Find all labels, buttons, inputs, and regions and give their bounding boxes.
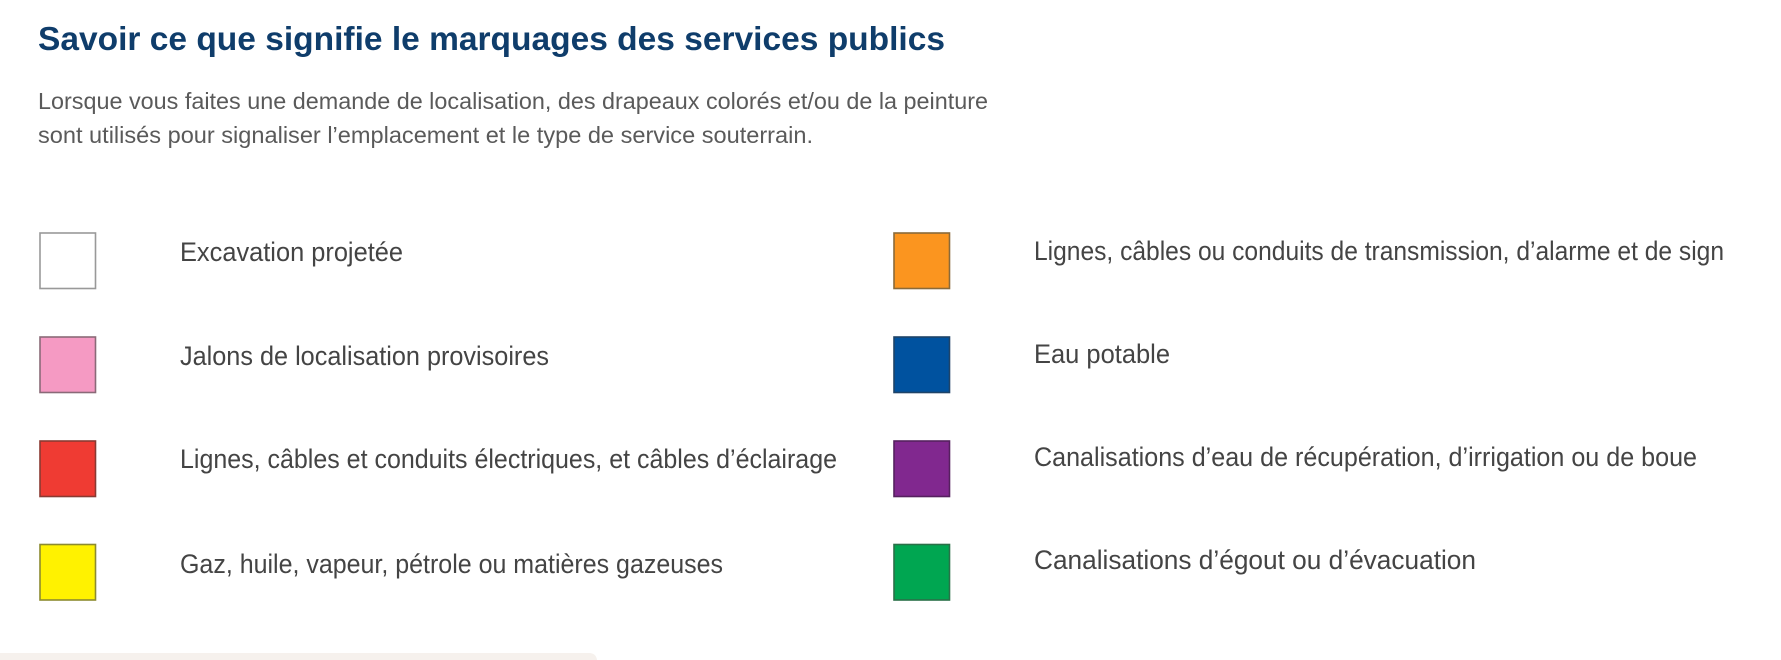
label: gas: Gaz, huile, vapeur, pétrole ou matières gazeuses — [180, 549, 723, 579]
label: sewer: Canalisations d’égout ou d’évacuation — [1034, 545, 1476, 575]
legend: left column — [40, 233, 837, 600]
swatch: white — [40, 233, 96, 288]
swatch: purple — [894, 441, 950, 496]
swatch: red — [40, 441, 96, 496]
label: reclaimed: Canalisations d’eau de récupération, d’irrigation ou de boue — [1034, 442, 1697, 472]
label: communication: Lignes, câbles ou conduits de transmission, d’alarme et de sign — [1034, 236, 1724, 266]
label: excavation: Excavation projetée — [180, 237, 403, 267]
bottom panel edge — [0, 653, 597, 660]
title: Savoir ce que signifie le marquages des services publics — [38, 21, 945, 58]
swatch: blue — [894, 337, 950, 392]
swatch: orange — [894, 233, 950, 288]
intro text: sont utilisés pour signaliser l’emplacement et le type de service souterrain. — [38, 122, 813, 148]
swatch: yellow — [40, 544, 96, 600]
intro text: Lorsque vous faites une demande de localisation, des drapeaux colorés et/ou de la peinture — [38, 88, 988, 114]
swatch: pink — [40, 337, 96, 392]
label: survey: Jalons de localisation provisoires — [180, 341, 549, 371]
legend: right column — [894, 233, 1724, 600]
swatch: green — [894, 544, 950, 600]
intro text — [38, 88, 988, 148]
label: water: Eau potable — [1034, 339, 1170, 369]
label: electric: Lignes, câbles et conduits électriques, et câbles d’éclairage — [180, 444, 837, 474]
